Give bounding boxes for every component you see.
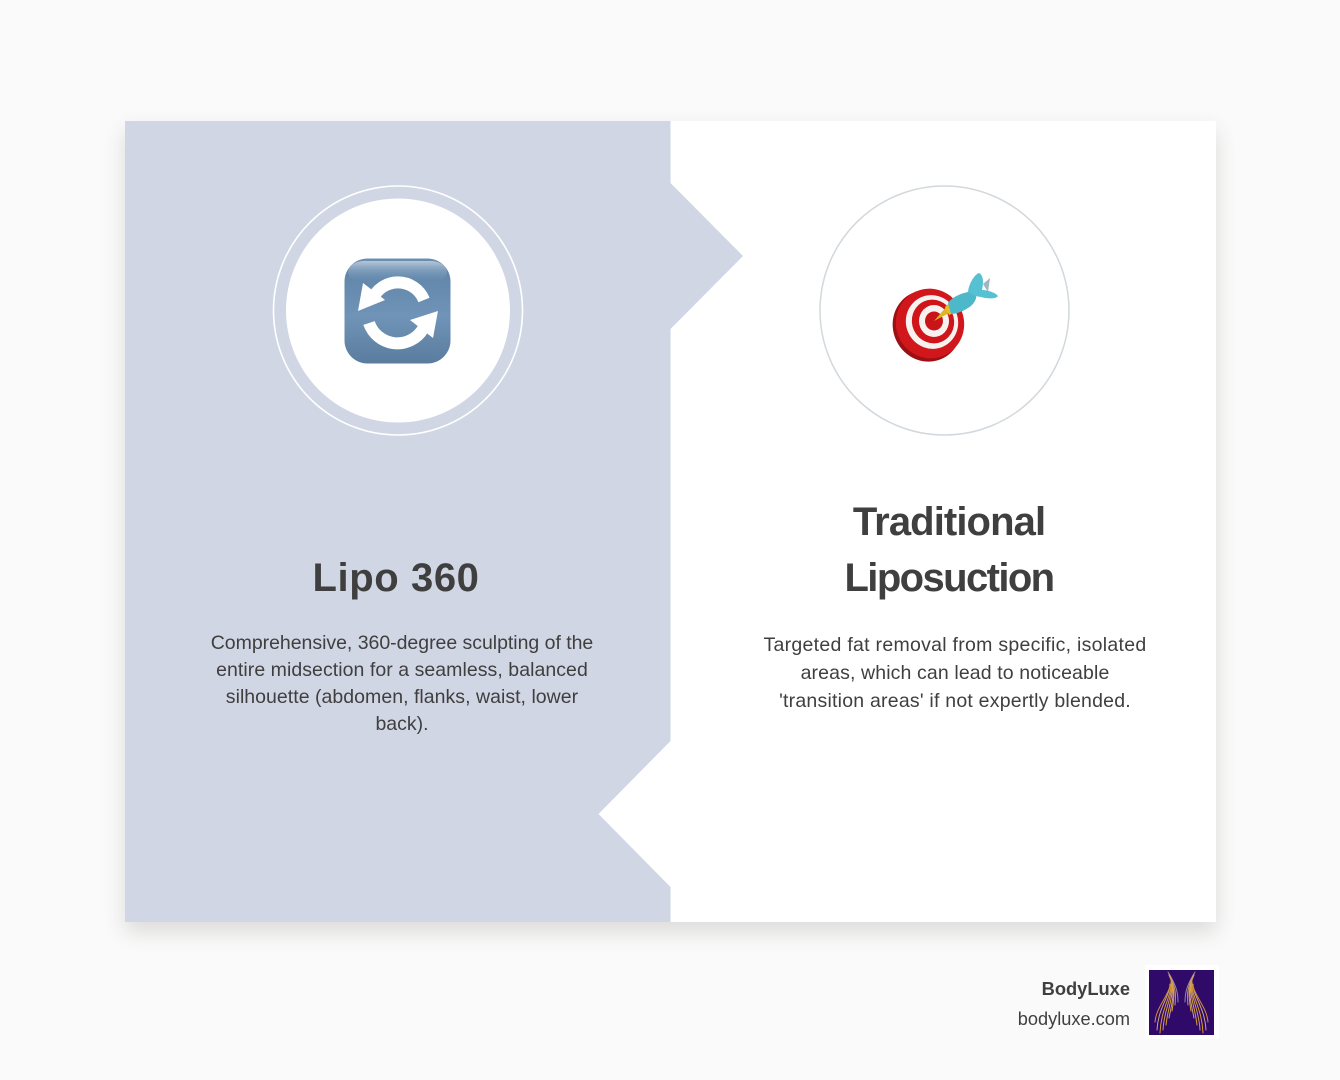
- icon circle: right: [819, 185, 1070, 436]
- comparison card: [125, 121, 1216, 922]
- panel: Traditional Liposuction: [764, 185, 1146, 712]
- heading: Traditional Liposuction: Liposuction: [844, 556, 1054, 600]
- description: Lipo 360: entire midsection for a seamless, balanced: [216, 659, 588, 681]
- heading: Traditional Liposuction: Traditional: [853, 500, 1045, 544]
- panel: Lipo 360: [211, 185, 593, 735]
- description: Traditional Liposuction: [764, 634, 1146, 712]
- description: Lipo 360: Comprehensive, 360-degree sculpting of the: [211, 632, 593, 654]
- description: Lipo 360: [211, 632, 593, 735]
- description: Lipo 360: silhouette (abdomen, flanks, waist, lower: [226, 686, 578, 708]
- brand url: bodyluxe.com: [1018, 1009, 1130, 1029]
- description: Traditional Liposuction: Targeted fat removal from specific, isolated: [764, 634, 1146, 656]
- description: Traditional Liposuction: areas, which can lead to noticeable: [801, 662, 1109, 684]
- heading: Traditional Liposuction: [844, 500, 1054, 600]
- icon circle: left: [272, 185, 524, 436]
- left panel background with arrow notches: [125, 121, 743, 922]
- heading: Lipo 360: Lipo 360: [312, 556, 480, 600]
- description: Lipo 360: back).: [375, 713, 429, 735]
- brand name: BodyLuxe: [1042, 978, 1130, 999]
- icon: refresh arrows: [344, 258, 450, 364]
- logo: gold wings: [1149, 970, 1214, 1035]
- description: Traditional Liposuction: 'transition areas' if not expertly blended.: [779, 690, 1131, 712]
- icon: dart target: [881, 273, 998, 373]
